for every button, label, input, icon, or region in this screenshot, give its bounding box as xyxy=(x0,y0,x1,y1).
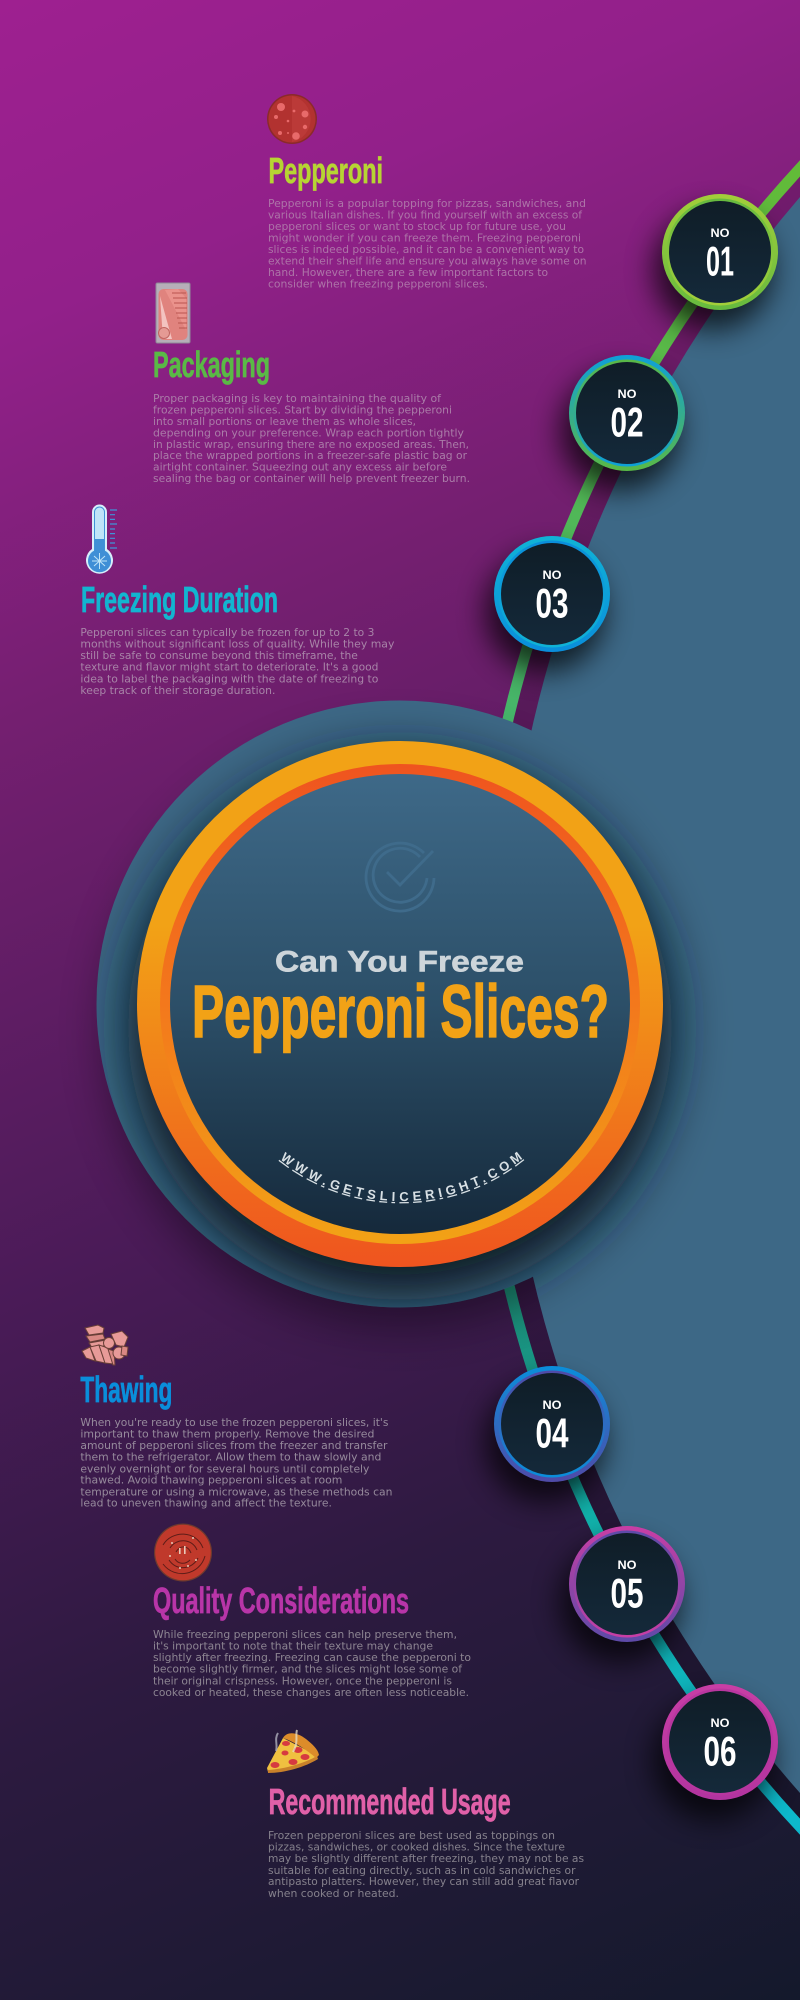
shadow xyxy=(485,1382,605,1502)
label: NO xyxy=(542,568,562,582)
central badge xyxy=(96,700,709,1308)
body text: may be slightly different after freezing, they may not be as xyxy=(268,1852,584,1865)
label: NO xyxy=(618,1558,636,1572)
body text: months without significant loss of quality. While they may xyxy=(80,638,394,651)
body text xyxy=(80,1416,392,1510)
heading: Thawing xyxy=(80,1369,172,1410)
label: NO xyxy=(710,226,730,240)
body text: place the wrapped portions in a freezer-safe plastic bag or xyxy=(153,449,468,462)
shadow xyxy=(485,552,605,672)
section: Recommended Usage xyxy=(267,1730,584,1900)
title line one: Can You Freeze xyxy=(275,946,524,978)
body text: pepperoni slices or want to stock up for future use, you xyxy=(268,220,566,233)
body text: Proper packaging is key to maintaining the quality of xyxy=(153,392,441,405)
body text: important to thaw them properly. Remove the desired xyxy=(80,1428,374,1441)
body text: amount of pepperoni slices from the freezer and transfer xyxy=(80,1439,388,1452)
body text: their original crispness. However, once the pepperoni is xyxy=(153,1674,452,1687)
heading: Packaging xyxy=(153,344,270,385)
number: 05 xyxy=(610,1570,644,1616)
body text: Pepperoni is a popular topping for pizzas, sandwiches, and xyxy=(268,197,586,210)
number: 03 xyxy=(536,580,568,626)
body text: in plastic wrap, ensuring there are no exposed areas. Then, xyxy=(153,438,469,451)
body text xyxy=(153,1628,471,1699)
section: Freezing Duration xyxy=(80,505,394,697)
body text: suitable for eating directly, such as in cold sandwiches or xyxy=(268,1864,576,1877)
body text: become slightly firmer, and the slices might lose some of xyxy=(153,1663,462,1676)
body text: evenly overnight or for several hours until completely xyxy=(80,1462,369,1475)
body text: depending on your preference. Wrap each portion tightly xyxy=(153,426,464,439)
icon: thermometer xyxy=(86,505,117,574)
rings xyxy=(662,1684,778,1800)
body text: still be safe to consume beyond this timeframe, the xyxy=(80,649,358,662)
body text xyxy=(80,626,394,697)
heading: Recommended Usage xyxy=(269,1781,511,1822)
section: Thawing xyxy=(80,1325,392,1510)
body text: slices is indeed possible, and it can be a convenient way to xyxy=(268,243,584,256)
body text: consider when freezing pepperoni slices. xyxy=(268,278,488,290)
badge NO 04 xyxy=(485,1366,610,1502)
body text: cooked or heated, these changes are often less noticeable. xyxy=(153,1686,469,1699)
shadow xyxy=(653,1700,773,1820)
icon: vacuum pack xyxy=(156,283,190,343)
body text: antipasto platters. However, they can still add great flavor xyxy=(268,1875,580,1888)
central badge cast shadow xyxy=(104,734,696,1326)
body text: slightly after freezing. Freezing can cause the pepperoni to xyxy=(153,1651,471,1664)
body text: them to the refrigerator. Allow them to thaw slowly and xyxy=(80,1451,381,1464)
badge NO 01 xyxy=(653,194,778,330)
badge NO 06 xyxy=(653,1684,778,1820)
icon: pepperoni slice xyxy=(267,94,317,144)
heading: Pepperoni xyxy=(268,150,383,191)
label: NO xyxy=(618,387,636,401)
timeline stripe xyxy=(475,164,800,1831)
badge inner shadow xyxy=(128,756,672,1300)
dark band behind timeline xyxy=(475,168,800,1830)
badge NO 02 xyxy=(560,355,685,491)
body text xyxy=(268,1829,584,1900)
body text: Frozen pepperoni slices are best used as toppings on xyxy=(268,1829,555,1842)
body text: thawed. Avoid thawing pepperoni slices at room xyxy=(80,1474,342,1487)
body text: lead to uneven thawing and affect the texture. xyxy=(80,1497,332,1510)
body text xyxy=(153,392,470,485)
icon: thawing pepperoni rolls xyxy=(82,1325,128,1365)
inner disc xyxy=(170,774,630,1234)
icon: pepperoni swirl xyxy=(154,1524,212,1582)
section: Pepperoni xyxy=(267,94,586,290)
website on arc: WWW.GETSLICERIGHT.COM xyxy=(282,1152,522,1202)
shadow xyxy=(560,1542,680,1662)
rings xyxy=(494,1366,610,1482)
badge NO 03 xyxy=(485,536,610,672)
body text: hand. However, there are a few important factors to xyxy=(268,266,548,279)
heading: Freezing Duration xyxy=(81,579,278,620)
big blue curved panel xyxy=(501,197,800,1793)
number: 06 xyxy=(704,1728,736,1774)
rings xyxy=(662,194,778,310)
badge NO 05 xyxy=(560,1526,685,1662)
rings xyxy=(569,1526,685,1642)
badge blue disc xyxy=(96,700,704,1308)
shadow xyxy=(653,210,773,330)
body text: When you're ready to use the frozen pepperoni slices, it's xyxy=(80,1416,389,1429)
body text: might wonder if you can freeze them. Freezing pepperoni xyxy=(268,232,581,244)
rings xyxy=(494,536,610,652)
orange inner ring xyxy=(160,764,640,1244)
body text: idea to label the packaging with the date of freezing to xyxy=(80,672,378,685)
body text: Pepperoni slices can typically be frozen for up to 2 to 3 xyxy=(80,626,374,639)
body text: into small portions or leave them as whole slices, xyxy=(153,415,416,428)
body text: While freezing pepperoni slices can help preserve them, xyxy=(153,1628,457,1641)
body text: keep track of their storage duration. xyxy=(80,684,275,697)
body text xyxy=(268,197,586,290)
body text: sealing the bag or container will help prevent freezer burn. xyxy=(153,472,470,485)
icon: check logo xyxy=(366,843,434,911)
icon: pizza slice xyxy=(267,1730,319,1773)
number: 02 xyxy=(610,398,644,446)
section: Quality Considerations xyxy=(153,1524,471,1699)
section: Packaging xyxy=(153,283,470,485)
body text: temperature or using a microwave, as these methods can xyxy=(80,1485,392,1498)
body text: extend their shelf life and ensure you always have some on xyxy=(268,254,586,268)
body text: it's important to note that their texture may change xyxy=(153,1640,433,1653)
rings xyxy=(569,355,685,471)
body text: pizzas, sandwiches, or cooked dishes. Since the texture xyxy=(268,1841,565,1854)
label: NO xyxy=(710,1716,730,1730)
body text: when cooked or heated. xyxy=(268,1887,399,1900)
body text: texture and flavor might start to deteriorate. It's a good xyxy=(80,661,378,674)
body text: frozen pepperoni slices. Start by dividing the pepperoni xyxy=(153,403,452,416)
heading: Quality Considerations xyxy=(153,1580,409,1621)
number: 04 xyxy=(536,1410,569,1456)
body text: airtight container. Squeezing out any excess air before xyxy=(153,461,447,474)
label: NO xyxy=(542,1398,562,1412)
body text: various Italian dishes. If you find yourself with an excess of xyxy=(268,208,582,222)
shadow xyxy=(560,371,680,491)
number: 01 xyxy=(706,238,734,284)
orange outer ring xyxy=(137,741,663,1267)
